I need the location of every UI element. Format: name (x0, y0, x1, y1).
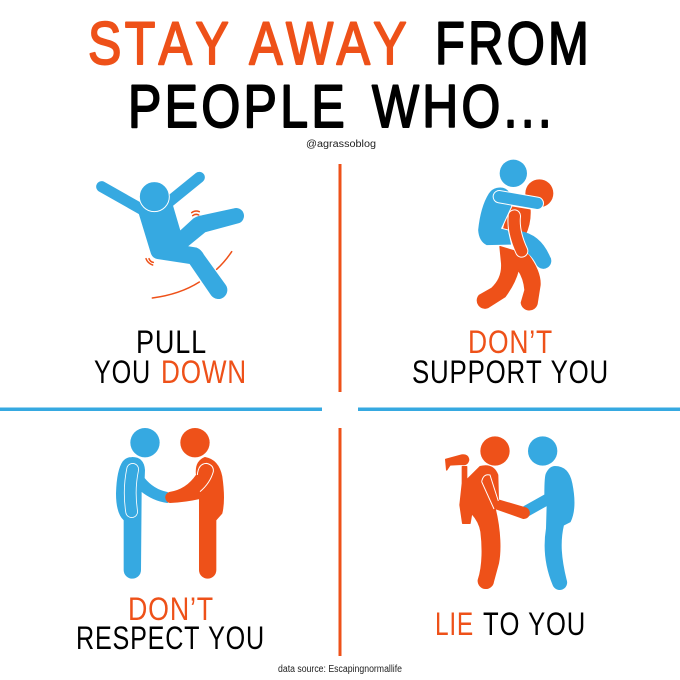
label: pull you down: DOWN (161, 354, 247, 390)
horizontal divider right (358, 408, 680, 411)
title: FROM (435, 10, 592, 77)
title: PEOPLE (128, 73, 348, 140)
vertical divider top (338, 164, 342, 392)
label: don't respect you: DON’T (128, 591, 214, 627)
author handle: @agrassoblog (306, 139, 376, 150)
icon: person carried on another's back (477, 160, 553, 310)
label: don't support you: DON’T (468, 324, 553, 360)
title: WHO... (372, 73, 555, 140)
label: pull you down: YOU (94, 354, 151, 390)
title: STAY AWAY (88, 10, 410, 77)
vertical divider bottom (338, 428, 342, 656)
data source credit: data source: Escapingnormallife (278, 664, 402, 675)
label: lie to you: TO YOU (483, 606, 586, 642)
label: lie to you: LIE (435, 606, 474, 642)
label: don't support you: SUPPORT YOU (412, 354, 609, 390)
icon: handshake with hidden axe behind back (446, 436, 574, 589)
horizontal divider left (0, 408, 322, 411)
label: pull you down (94, 324, 247, 390)
label: don't respect you: RESPECT YOU (76, 620, 265, 656)
label: don't support you (412, 324, 609, 390)
icon: two people shaking hands (117, 428, 223, 578)
label: lie to you (435, 606, 586, 642)
title (88, 10, 592, 140)
label: pull you down: PULL (136, 324, 207, 360)
icon: person falling (102, 177, 243, 298)
label: don't respect you (76, 591, 265, 656)
